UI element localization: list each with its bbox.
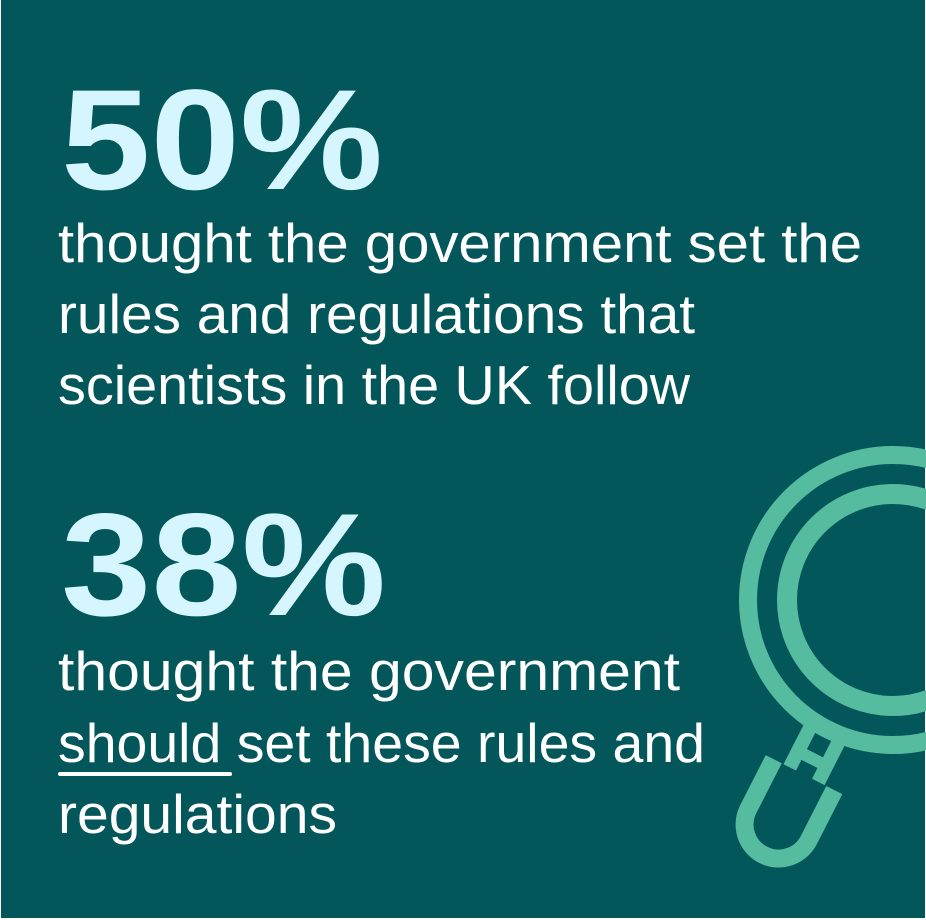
text block: first statement [58,212,862,416]
stat: 38%: 38% [61,483,386,646]
stat: 50%: 50% [61,61,383,220]
text block: second statement [58,640,705,845]
text block: first statement: thought the government set the [58,212,862,274]
text block: second statement: regulations [58,783,337,845]
text block: first statement: rules and regulations that [58,283,695,345]
icon: magnifying glass [733,455,926,870]
text block: first statement: scientists in the UK follow [58,354,690,416]
text block: second statement: thought the government [58,640,680,702]
text block: second statement: should set these rules and [58,712,705,774]
